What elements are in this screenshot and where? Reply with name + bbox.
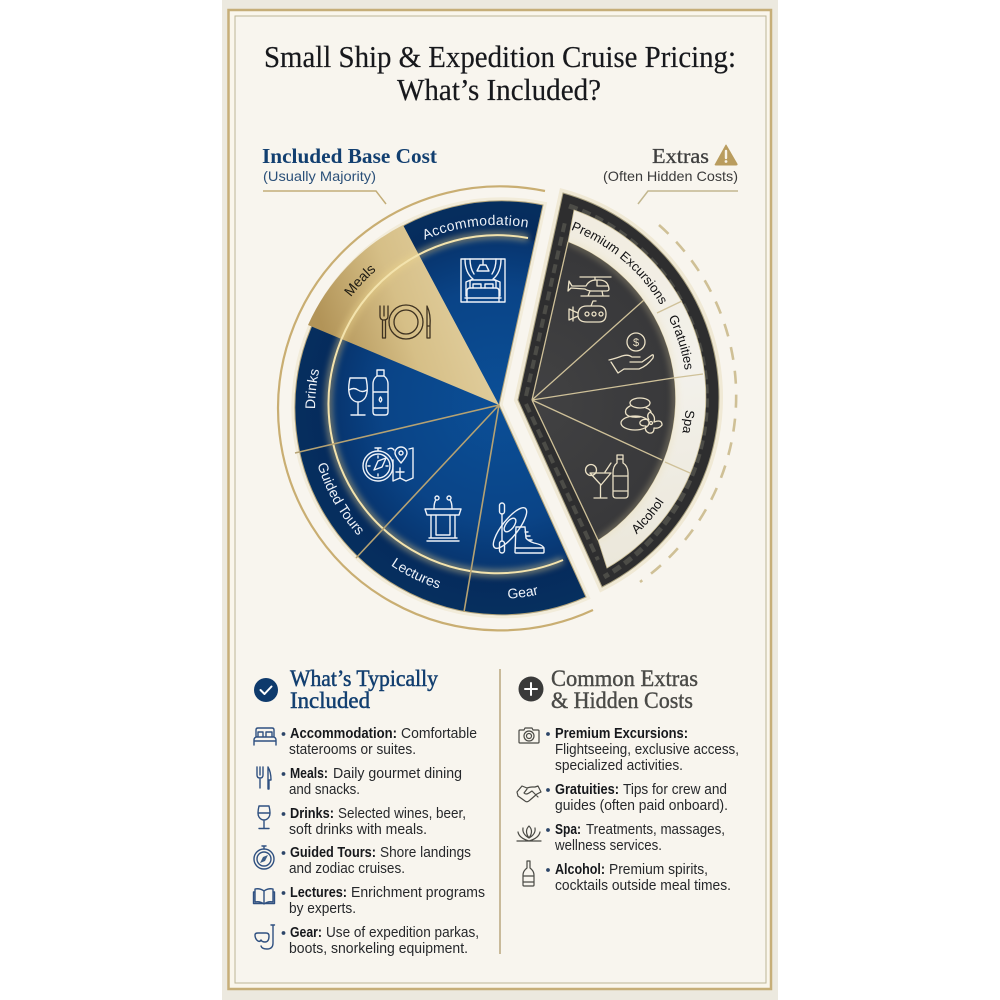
icon: plus badge [518,676,544,702]
item: alcohol [523,861,731,894]
icon: spa stones [621,398,662,433]
item: meals: Meals: [290,766,328,782]
item: lectures [254,885,485,917]
item: gratuities: Gratuities: [555,782,619,798]
item: guided tours: and zodiac cruises. [289,861,405,877]
item: alcohol: Premium spirits, [609,862,708,878]
heading [290,666,438,713]
chart: extras pie [514,188,738,592]
item: accommodation: Accommodation: [290,726,397,742]
icon: warning triangle [715,145,737,165]
title [264,39,736,107]
item: meals: and snacks. [289,782,360,798]
item: guided tours: Shore landings [380,845,471,861]
callout: included base cost: (Usually Majority) [263,168,376,184]
heading: Common Extras [551,666,698,691]
label: gear: Gear [508,587,538,598]
callout: extras: Extras [652,144,709,168]
item: gratuities: guides (often paid onboard). [555,798,728,814]
item: gear: Use of expedition parkas, [326,925,479,941]
icon: plate and cutlery [380,305,430,339]
item: accommodation: staterooms or suites. [289,742,416,758]
heading: Included [290,688,370,713]
item: accommodation: Comfortable [401,726,477,742]
item: drinks: Drinks: [290,806,334,822]
callout: included base cost [262,144,437,204]
item: drinks: Selected wines, beer, [338,806,466,822]
callout: included base cost: Included Base Cost [262,144,437,168]
heading: & Hidden Costs [551,688,693,713]
icon: podium [425,496,461,541]
label: accommodation: Accommodation [424,214,528,240]
icon: hand with coin: $ [633,337,639,349]
heading: What’s Typically [290,666,438,691]
title: Small Ship & Expedition Cruise Pricing: [264,39,736,74]
item: alcohol: cocktails outside meal times. [555,878,731,894]
icon: compass and map [363,447,413,481]
item: accommodation [254,726,477,758]
icon: check badge [254,678,278,702]
label: drinks: Drinks [305,369,319,408]
label: alcohol: Alcohol [633,497,664,534]
heading [551,666,698,713]
item: premium excursions: specialized activities. [555,758,683,774]
divider [499,669,501,954]
item: guided tours [254,845,471,877]
item: lectures: Lectures: [290,885,347,901]
icon: cocktail and bottle [586,455,628,498]
item: premium excursions [519,726,739,774]
chart: included base cost pie [276,185,594,632]
item: gratuities [517,782,728,814]
label: spa: Spa [682,410,694,433]
panel: what's typically included [254,666,485,957]
label: lectures: Lectures [392,558,440,588]
icon: bed [461,259,505,302]
icon: hand with coin [609,333,653,373]
item: meals: Daily gourmet dining [333,766,462,782]
panel: common extras and hidden costs [517,666,739,894]
label: meals: Meals [344,266,376,296]
item: spa [517,822,725,854]
callout: extras: (Often Hidden Costs) [603,168,738,184]
label: premium excursions: Premium Excursions [572,222,666,304]
band: extras labels [568,210,706,568]
wedges: extras interior [532,242,675,540]
item: gear: Gear: [290,925,322,941]
item: lectures: Enrichment programs [351,885,485,901]
panel: page background [222,0,778,1000]
icon: wine and water [349,370,388,415]
item: drinks [258,806,466,838]
item: gear [255,925,479,957]
label: guided tours: Guided Tours [318,463,363,535]
callout: extras [603,144,738,204]
item: spa: wellness services. [554,838,662,854]
item: alcohol: Alcohol: [555,862,605,878]
label: gratuities: Gratuities [670,316,692,370]
title: What’s Included? [397,72,601,107]
item: premium excursions: Premium Excursions: [555,726,688,742]
item: lectures: by experts. [289,901,356,917]
item: premium excursions: Flightseeing, exclusive access, [555,742,739,758]
item: meals [257,766,462,798]
item: drinks: soft drinks with meals. [289,822,427,838]
item: gear: boots, snorkeling equipment. [289,941,468,957]
item: spa: Spa: [555,822,581,838]
item: guided tours: Guided Tours: [290,845,376,861]
item: gratuities: Tips for crew and [623,782,727,798]
wedge: meals [308,225,499,405]
icon: kayak and boot [488,503,544,553]
icon: helicopter [568,277,611,296]
item: spa: Treatments, massages, [586,822,725,838]
icon: submarine [569,301,606,322]
